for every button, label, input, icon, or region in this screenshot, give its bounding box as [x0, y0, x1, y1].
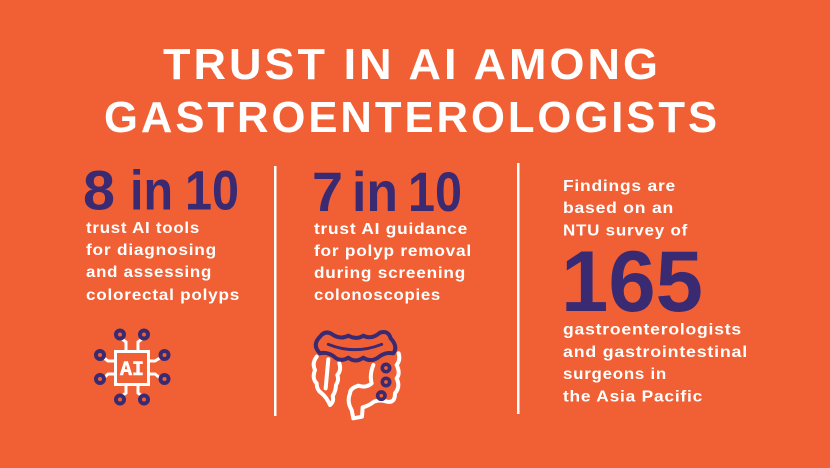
panel: survey details [561, 178, 748, 406]
panel: 8 in 10 statistic [83, 158, 240, 304]
big number: 8 in 10: 10 [185, 158, 239, 222]
divider left [274, 166, 276, 416]
text block: survey respondents: gastroenterologists [563, 322, 742, 338]
icon: AI chip [96, 330, 168, 404]
text block: 8 in 10 description: trust AI tools [86, 220, 200, 237]
text block: 8 in 10 description [86, 220, 240, 304]
big number: 7 in 10: 10 [408, 160, 462, 223]
text block: survey respondents: and gastrointestinal [563, 344, 748, 361]
title: GASTROENTEROLOGISTS [104, 93, 720, 142]
icon: colon [314, 332, 399, 418]
big number: 7 in 10 [312, 160, 462, 223]
text block: 7 in 10 description: during screening [314, 265, 466, 282]
text block: 7 in 10 description [314, 221, 472, 304]
divider right [517, 163, 520, 414]
big number: 8 in 10 [83, 158, 239, 222]
big number: 8 in 10: 8 [83, 158, 115, 222]
big number: 7 in 10: 7 [312, 160, 343, 223]
text block: 8 in 10 description: and assessing [86, 264, 212, 281]
text block: 7 in 10 description: for polyp removal [314, 243, 472, 260]
panel: 7 in 10 statistic [312, 160, 472, 304]
text block: survey intro: based on an [563, 200, 674, 217]
text block: survey intro [563, 178, 688, 240]
big number: 7 in 10: in [352, 160, 398, 223]
text block: survey respondents: the Asia Pacific [563, 388, 703, 406]
big number: 8 in 10: in [130, 158, 173, 222]
text block: survey intro: NTU survey of [563, 222, 688, 240]
title: TRUST IN AI AMONG [163, 40, 661, 89]
text block: 7 in 10 description: colonoscopies [314, 287, 441, 304]
icon: AI chip: AI [120, 359, 144, 382]
text block: 8 in 10 description: colorectal polyps [86, 287, 240, 304]
text block: 8 in 10 description: for diagnosing [86, 242, 217, 259]
big number: 165: 165 [561, 234, 703, 330]
text block: survey respondents [563, 322, 748, 406]
title [104, 40, 720, 142]
text block: survey respondents: surgeons in [563, 366, 667, 383]
text block: survey intro: Findings are [563, 178, 676, 195]
text block: 7 in 10 description: trust AI guidance [314, 221, 468, 238]
